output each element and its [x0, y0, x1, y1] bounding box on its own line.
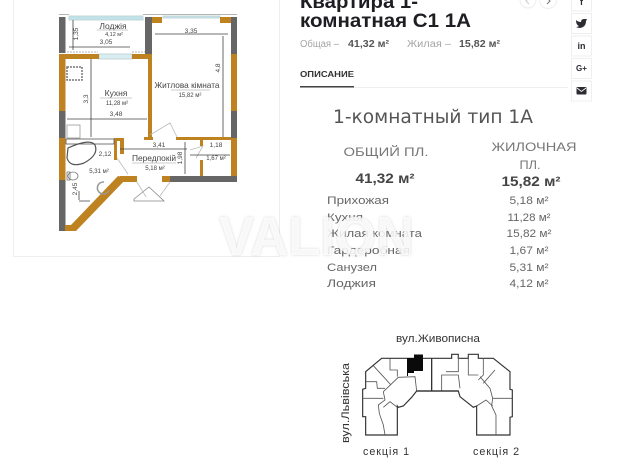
watermark: VALION — [219, 205, 414, 267]
room labels — [72, 21, 226, 195]
street label: side: вул.Львівська — [340, 362, 352, 443]
dimension numbers: 3,3 — [83, 94, 90, 104]
dimension numbers: 3,35 — [185, 28, 198, 35]
room areas list — [506, 195, 552, 290]
dimension lines — [67, 20, 230, 201]
room names list: Лоджия — [327, 278, 376, 290]
room names list: Жилая комната — [327, 228, 423, 240]
dimension numbers: 3,48 — [110, 111, 123, 118]
dimension numbers: 2,45 — [72, 182, 79, 195]
column: total area: ОБЩИЙ ПЛ. — [344, 144, 428, 159]
label: loggia: Лоджія — [99, 21, 127, 31]
social share buttons — [572, 0, 592, 101]
dimension numbers: 3,41 — [153, 142, 166, 149]
social share buttons: in — [578, 41, 586, 51]
title — [300, 0, 471, 32]
column: living area: ПЛ. — [520, 158, 540, 172]
area summary: 41,32 м² — [348, 39, 390, 50]
gold partition walls — [59, 17, 237, 231]
room areas list: 4,12 м² — [510, 278, 549, 290]
dimension numbers: 1,35 — [73, 27, 80, 40]
label: kitchen: Кухня — [105, 88, 128, 98]
room areas list: 15,82 м² — [506, 228, 552, 240]
social share buttons: G+ — [576, 64, 587, 73]
label: living room: 15,82 м² — [179, 93, 201, 99]
section plan — [340, 333, 520, 458]
label: loggia: 4,12 м² — [105, 32, 123, 38]
street label: top: вул.Живописна — [396, 333, 481, 345]
area summary — [300, 38, 501, 50]
area summary: Жилая – — [407, 39, 451, 50]
label: hallway: Передпокій — [132, 153, 176, 163]
label: living room: Житлова кімната — [154, 80, 220, 90]
column: living area — [492, 140, 576, 189]
room names list — [327, 195, 423, 290]
dimension numbers: 2,12 — [99, 151, 112, 158]
label: wardrobe area: 1,67 м² — [206, 156, 226, 162]
section plan: секція 2 — [473, 446, 520, 458]
panel: floor plan frame — [14, 0, 280, 256]
label: loggia — [97, 21, 128, 38]
area summary: 15,82 м² — [459, 39, 501, 50]
gray structural walls — [59, 17, 237, 231]
highlighted apartment — [407, 354, 423, 376]
room areas list: 11,28 м² — [508, 212, 551, 224]
title: комнатная С1 1А — [300, 10, 471, 32]
column: living area: ЖИЛОЧНАЯ — [492, 140, 576, 154]
label: kitchen: 11,28 м² — [106, 101, 128, 107]
label: living room — [154, 80, 220, 99]
tab: description: ОПИСАНИЕ — [300, 69, 354, 79]
room names list: Прихожая — [327, 195, 389, 207]
label: kitchen — [100, 88, 132, 107]
label: hallway: 5,18 м² — [145, 166, 165, 172]
dimension numbers: 3,05 — [100, 39, 113, 46]
room areas list: 1,67 м² — [510, 245, 549, 257]
floor plan — [59, 14, 237, 231]
label: hallway — [132, 153, 176, 172]
section outline — [363, 354, 512, 435]
room areas list: 5,31 м² — [510, 262, 549, 274]
prev and next arrows — [520, 0, 556, 8]
room names list: Кухня — [327, 212, 363, 224]
section labels: секція 1 — [363, 446, 410, 458]
column: living area: 15,82 м² — [502, 173, 561, 189]
label: bathroom area: 5,31 м² — [89, 169, 109, 175]
dimension numbers — [72, 27, 223, 195]
heading: apartment type: 1-комнатный тип 1А — [333, 106, 533, 128]
dimension numbers: 1,98 — [177, 151, 184, 164]
room names list: Санузел — [327, 262, 377, 274]
column: total area — [344, 144, 428, 186]
column: total area: 41,32 м² — [356, 170, 415, 186]
dimension numbers: 4,8 — [215, 63, 222, 73]
room areas list: 5,18 м² — [510, 195, 549, 207]
kitchen and bath fixtures — [66, 67, 203, 201]
area summary: Общая – — [300, 38, 339, 50]
loggia glazing — [59, 14, 237, 59]
dimension numbers: 1,18 — [210, 142, 223, 149]
room names list: Гардеробная — [327, 245, 410, 257]
